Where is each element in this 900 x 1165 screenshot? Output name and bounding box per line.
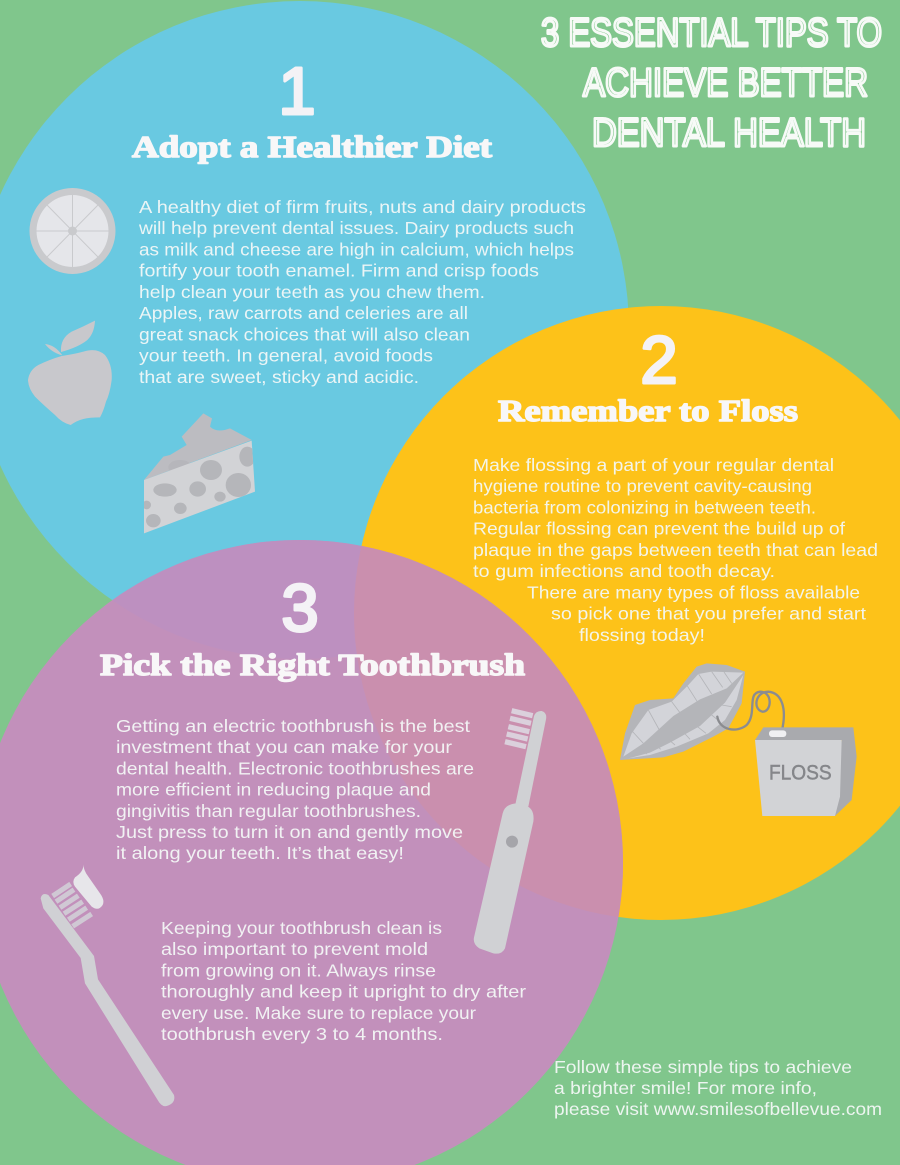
text block: electric toothbrush: investment that you can make for your: [116, 737, 452, 757]
number 2: 2: [640, 323, 678, 398]
text block: electric toothbrush: more efficient in reducing plaque and: [116, 780, 431, 800]
text block: flossing: Regular flossing can prevent the build up of: [473, 519, 845, 539]
icon: manual toothbrush with paste: [41, 864, 174, 1106]
text block: diet: will help prevent dental issues. Dairy products such: [138, 218, 574, 238]
text block: cleaning toothbrush: [161, 918, 526, 1044]
text block: flossing: [473, 455, 878, 645]
footer text: Follow these simple tips to achieve: [554, 1057, 852, 1077]
text block: cleaning toothbrush: Keeping your toothbrush clean is: [161, 918, 442, 938]
icon: citrus slice: [30, 188, 116, 274]
heading: Pick the Right Toothbrush: Pick the Right Toothbrush: [100, 647, 525, 682]
text block: flossing: Make flossing a part of your regular dental: [473, 455, 834, 475]
icon: lips with floss: [620, 663, 784, 760]
circle: purple panel: [0, 540, 623, 1165]
text block: flossing: hygiene routine to prevent cavity-causing: [473, 476, 812, 496]
title: [541, 11, 882, 155]
text block: diet: as milk and cheese are high in calcium, which helps: [139, 240, 574, 260]
text block: electric toothbrush: gingivitis than regular toothbrushes.: [116, 801, 421, 821]
icon: cheese: [142, 413, 255, 533]
circle: blue panel: [0, 1, 629, 659]
icon: floss box: FLOSS: [769, 760, 832, 784]
text block: cleaning toothbrush: also important to prevent mold: [161, 939, 428, 959]
footer text: [554, 1057, 882, 1119]
text block: flossing: There are many types of floss available: [527, 582, 860, 602]
text block: cleaning toothbrush: from growing on it. Always rinse: [161, 960, 436, 980]
icon: electric toothbrush: [474, 711, 546, 954]
text block: flossing: plaque in the gaps between teeth that can lead: [473, 540, 878, 560]
text block: cleaning toothbrush: thoroughly and keep it upright to dry after: [161, 982, 526, 1002]
text block: diet: [138, 197, 586, 387]
icon: apple: [28, 321, 112, 425]
footer text: a brighter smile! For more info,: [554, 1078, 817, 1098]
text block: diet: A healthy diet of firm fruits, nuts and dairy products: [139, 197, 586, 217]
text block: diet: great snack choices that will also clean: [139, 324, 470, 344]
text block: diet: that are sweet, sticky and acidic.: [139, 367, 419, 387]
text block: diet: help clean your teeth as you chew them.: [139, 282, 485, 302]
footer text: please visit www.smilesofbellevue.com: [554, 1099, 882, 1119]
circle: yellow panel: [354, 306, 900, 920]
text block: electric toothbrush: it along your teeth. It’s that easy!: [116, 843, 404, 863]
text block: diet: fortify your tooth enamel. Firm and crisp foods: [139, 261, 539, 281]
heading: Adopt a Healthier Diet: Adopt a Healthier Diet: [132, 129, 493, 164]
text block: flossing: to gum infections and tooth decay.: [473, 561, 775, 581]
text block: flossing: flossing today!: [579, 625, 705, 645]
number 1: 1: [278, 54, 316, 129]
text block: electric toothbrush: Just press to turn it on and gently move: [116, 822, 463, 842]
text block: diet: Apples, raw carrots and celeries are all: [139, 303, 468, 323]
text block: electric toothbrush: Getting an electric toothbrush is the best: [116, 716, 470, 736]
text block: electric toothbrush: dental health. Electronic toothbrushes are: [116, 758, 474, 778]
text block: flossing: bacteria from colonizing in between teeth.: [473, 498, 816, 518]
text block: diet: your teeth. In general, avoid foods: [139, 346, 433, 366]
number 3: 3: [281, 571, 319, 646]
text block: flossing: so pick one that you prefer and start: [551, 604, 866, 624]
icon: floss box: [755, 727, 857, 816]
text block: cleaning toothbrush: toothbrush every 3 to 4 months.: [161, 1024, 443, 1044]
text block: electric toothbrush: [116, 716, 474, 863]
text block: cleaning toothbrush: every use. Make sure to replace your: [161, 1003, 476, 1023]
heading: Remember to Floss: Remember to Floss: [498, 393, 798, 428]
